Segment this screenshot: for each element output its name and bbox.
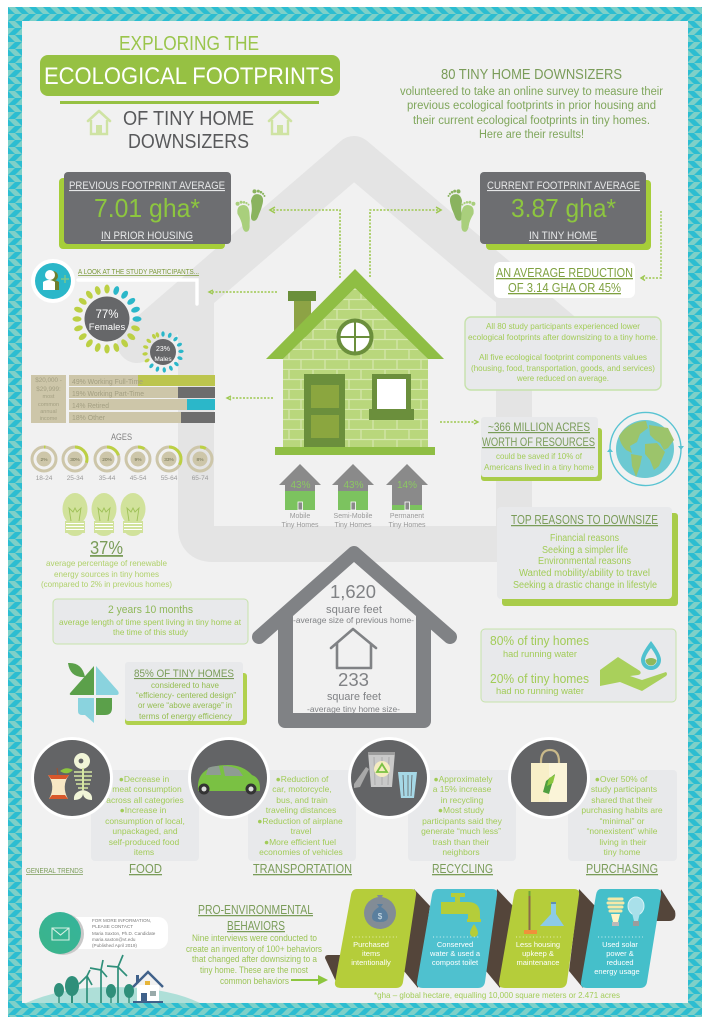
panel: running water: had running water — [503, 649, 577, 659]
icon: faucet — [441, 893, 481, 937]
door — [304, 374, 345, 447]
recycling text: neighbors — [442, 847, 480, 857]
chart: employment bars: 14% Retired — [72, 401, 109, 410]
icon: small house outline — [331, 629, 376, 668]
icon: hand — [600, 657, 667, 691]
panel: top reasons: TOP REASONS TO DOWNSIZE — [511, 513, 658, 527]
panel: 366 million acres: WORTH OF RESOURCES — [482, 435, 595, 449]
contact block — [39, 912, 168, 955]
current value: 3.87 gha* — [511, 193, 616, 223]
panel: efficiency: “efficiency- centered design” — [136, 690, 236, 700]
purchasing text: living in their — [599, 837, 647, 847]
chart: tiny home types — [279, 464, 428, 529]
icon: small house right — [269, 111, 291, 134]
panel: income: common — [38, 402, 59, 408]
recycling text: generate “much less” — [421, 826, 501, 836]
panel: lower footprints — [465, 317, 661, 390]
tiny home size — [307, 670, 400, 714]
card: upkeep — [499, 889, 579, 988]
purchasing text: “minimal” or — [600, 816, 645, 826]
panel: income: $20,000 - — [35, 377, 62, 384]
panel: time in tiny home: 2 years 10 months — [108, 604, 193, 616]
behaviors body: common behaviors — [220, 976, 289, 986]
renewable text — [41, 558, 172, 589]
contact text: (Published April 2019) — [92, 943, 137, 948]
chart: tiny home types: Tiny Homes — [281, 522, 319, 529]
chart: tiny home types: 43% — [343, 480, 364, 491]
intro body: volunteered to take an online survey to measure their — [400, 86, 663, 98]
panel: income: income — [40, 416, 57, 422]
round window — [338, 320, 372, 354]
panel: income: most — [43, 394, 55, 400]
icon: footprints right — [447, 189, 476, 233]
panel: efficiency — [125, 662, 247, 725]
panel: 366 million acres: could be saved if 10% of — [496, 451, 583, 461]
icon: person — [43, 270, 69, 290]
recycling text: participants said they — [422, 816, 503, 826]
panel: previous footprint — [59, 172, 231, 249]
renewable value: 37% — [90, 538, 123, 558]
contact text — [92, 918, 156, 948]
panel: running water: had no running water — [496, 686, 584, 696]
card: upkeep: maintenance — [517, 958, 559, 967]
ages heading: AGES — [111, 432, 132, 442]
card: energy: Used solar — [602, 940, 638, 949]
intro body: previous ecological footprints in prior housing and — [407, 100, 656, 112]
previous home size: square feet — [326, 604, 382, 616]
panel: time in tiny home: average length of time spent living in tiny home at — [59, 617, 242, 627]
card: purchased — [335, 889, 416, 988]
panel: top reasons: Environmental reasons — [538, 556, 631, 567]
renewable text: (compared to 2% in previous homes) — [41, 579, 172, 589]
card: water: Conserved — [437, 940, 473, 949]
ribbon connectors — [325, 889, 675, 988]
big grey house: home sizes — [259, 553, 450, 728]
chart: ages: 20% — [102, 457, 113, 463]
intro text — [400, 66, 663, 141]
chart: tiny home types: Mobile — [290, 513, 310, 520]
card: purchased: Purchased — [353, 940, 389, 949]
transportation text: ●Reduction of — [276, 774, 329, 784]
previous home size — [293, 582, 414, 625]
chart: ages: 35-44 — [99, 475, 116, 482]
contact text: maria.saxton@vt.edu — [92, 937, 136, 942]
panel: top reasons: Financial reasons — [550, 533, 619, 544]
chart: ages: 25-34 — [67, 475, 84, 482]
general trends label: GENERAL TRENDS — [26, 866, 83, 875]
contact text: PLEASE CONTACT — [92, 924, 133, 929]
icon: water drop — [641, 641, 661, 670]
panel: efficiency: or were “above average” in — [138, 700, 232, 710]
panel: 366 million acres: ~366 MILLION ACRES — [488, 420, 590, 434]
chart: ages: 18-24 — [36, 475, 53, 482]
panel: income: annual — [40, 409, 57, 415]
arrow: to resources — [440, 420, 478, 424]
food text — [105, 774, 185, 857]
tiny home size: -average tiny home size- — [307, 705, 400, 714]
transportation text: economies of vehicles — [259, 847, 343, 857]
wind turbines — [79, 955, 127, 1003]
title line 4: DOWNSIZERS — [128, 131, 249, 153]
transportation text — [257, 774, 343, 857]
arrow: income — [227, 396, 273, 400]
icon: footprints left — [235, 189, 266, 233]
food text: unpackaged, and — [112, 826, 178, 836]
contact text: Maria Saxton, Ph.D. Candidate — [92, 931, 156, 936]
chart: tiny home types: Permanent — [390, 513, 424, 520]
chart: ages: 8% — [197, 457, 204, 463]
icon: money bag: $ — [378, 912, 383, 921]
icon: fish skeleton — [74, 753, 92, 800]
previous value: 7.01 gha* — [94, 193, 200, 223]
trees — [54, 976, 134, 1003]
panel: food trends — [31, 737, 199, 876]
transportation text: travel — [291, 826, 311, 836]
chart: ages: 2% — [41, 457, 48, 463]
card: water: water & used a — [429, 949, 481, 958]
tiny home size: 233 — [338, 670, 369, 690]
background house outline — [137, 156, 575, 544]
behaviors body: Nine interviews were conducted to — [192, 933, 317, 943]
panel: running water — [481, 629, 676, 702]
chart: employment bars — [69, 375, 215, 423]
panel: time in tiny home: the time of this study — [113, 627, 189, 637]
chart: males 23% — [142, 331, 184, 373]
chart: males 23%: 23% — [156, 346, 170, 353]
recycling text: a 15% increase — [433, 784, 492, 794]
chart: males 23%: Males — [154, 356, 172, 363]
chart: tiny home types: 14% — [397, 480, 417, 491]
panel: running water: 20% of tiny homes — [490, 671, 589, 686]
arrow: to previous footprint — [270, 207, 340, 278]
tiny home size: square feet — [327, 691, 381, 703]
food text: meat consumption — [112, 784, 182, 794]
icon: small house left — [88, 111, 110, 134]
food text: ●Increase in — [120, 805, 167, 815]
participants label: A LOOK AT THE STUDY PARTICIPANTS... — [78, 267, 199, 276]
behaviors heading: PRO-ENVIRONMENTAL — [198, 903, 313, 917]
icon: car — [198, 765, 260, 794]
transportation text: car, motorcycle, — [272, 784, 332, 794]
panel: income — [31, 375, 66, 423]
panel: top reasons — [497, 507, 678, 606]
chart: ages: 45-54 — [130, 475, 147, 482]
chimney — [288, 291, 316, 337]
landscape illustration — [26, 955, 200, 1003]
card: water: compost toilet — [432, 958, 479, 967]
intro body — [400, 86, 663, 141]
purchasing text: ●Over 50% of — [595, 774, 648, 784]
intro body: their current ecological footprints in tiny homes. — [413, 115, 650, 127]
panel: running water: 80% of tiny homes — [490, 633, 589, 648]
transportation text: traveling distances — [266, 805, 336, 815]
intro heading: 80 TINY HOME DOWNSIZERS — [441, 66, 622, 83]
transportation text: bus, and train — [276, 795, 328, 805]
farmhouse — [133, 972, 163, 1003]
card: purchased: items — [362, 949, 380, 958]
chart: females 77%: Females — [89, 322, 125, 333]
icon: shopping bag — [531, 750, 567, 802]
previous note: IN PRIOR HOUSING — [101, 230, 193, 242]
chart: employment bars: 49% Working Full-Time — [72, 377, 143, 386]
panel: 366 million acres: Americans lived in a tiny home — [484, 462, 594, 472]
panel: study participants heading — [31, 259, 199, 304]
panel: transportation trends — [188, 737, 356, 876]
icon: envelope — [52, 928, 69, 940]
title line 2: ECOLOGICAL FOOTPRINTS — [44, 63, 334, 90]
icon: recycling bins — [354, 752, 417, 798]
chart: ages — [32, 432, 212, 482]
panel: current footprint — [480, 172, 651, 250]
renewable text: average percentage of renewable — [46, 558, 167, 568]
title rule — [60, 101, 319, 104]
chart: ages: 65-74 — [192, 475, 209, 482]
chart: employment bars: 19% Working Part-Time — [72, 389, 144, 398]
card: energy: power & — [606, 949, 634, 958]
panel: efficiency: considered to have — [151, 680, 219, 690]
roof — [266, 269, 444, 359]
food text: across all categories — [106, 795, 184, 805]
purchasing text: shared that their — [591, 795, 653, 805]
walls — [283, 288, 428, 447]
panel: purchasing trends — [508, 737, 677, 876]
purchasing text: study participants — [591, 784, 657, 794]
title — [40, 33, 340, 153]
food text: consumption of local, — [105, 816, 185, 826]
card: energy: reduced — [606, 958, 634, 967]
panel: recycling trends — [348, 737, 516, 876]
panel: top reasons: Seeking a simpler life — [542, 545, 628, 556]
chart: ages: 9% — [135, 457, 142, 463]
previous home size: -average size of previous home- — [293, 616, 414, 625]
previous label: PREVIOUS FOOTPRINT AVERAGE — [69, 180, 225, 192]
panel: lower footprints: (housing, food, transportation, goods, and services) — [471, 363, 655, 373]
square window — [369, 374, 414, 420]
chart: tiny home types: Tiny Homes — [388, 522, 426, 529]
behaviors body: that changed after downsizing to a — [192, 954, 317, 964]
panel: lower footprints: ecological footprints after downsizing to a tiny home. — [468, 332, 658, 342]
arrow: reduction — [641, 211, 661, 280]
panel: lower footprints: were reduced on average. — [516, 373, 609, 383]
icon: efficiency house — [68, 663, 119, 723]
panel: time in tiny home — [53, 599, 248, 644]
chart: tiny home types: Semi-Mobile — [334, 513, 373, 520]
chart: ages: 55-64 — [161, 475, 178, 482]
panel: efficiency: 85% OF TINY HOMES — [134, 668, 234, 680]
transportation text: ●More efficient fuel — [264, 837, 336, 847]
callout: average reduction: AN AVERAGE REDUCTION — [496, 265, 633, 280]
arrow: participants — [209, 290, 277, 294]
card: water — [417, 889, 497, 988]
recycling text — [421, 774, 503, 857]
food text: self-produced food — [109, 837, 179, 847]
purchasing label: PURCHASING — [586, 861, 658, 876]
food text: items — [134, 847, 154, 857]
arrow: to current footprint — [370, 207, 441, 277]
previous home size: 1,620 — [330, 582, 376, 602]
title pill — [40, 55, 340, 96]
chart: females 77% — [72, 284, 142, 354]
current note: IN TINY HOME — [529, 230, 597, 242]
chart: employment bars: 18% Other — [72, 413, 105, 422]
panel: income: $29,999: — [36, 386, 61, 393]
purchasing text: tiny home — [604, 847, 641, 857]
behaviors body: create an inventory of 100+ behaviors — [186, 944, 322, 954]
recycling text: ●Approximately — [434, 774, 493, 784]
contact text: FOR MORE INFORMATION, — [92, 918, 151, 923]
icon: light bulbs — [62, 493, 146, 536]
icon: apple core — [48, 768, 73, 799]
renewable energy stat — [41, 538, 172, 589]
chart: ages: 33% — [164, 457, 175, 463]
chart: females 77%: 77% — [95, 309, 119, 321]
title line 1: EXPLORING THE — [119, 33, 259, 55]
transportation label: TRANSPORTATION — [253, 861, 352, 876]
purchasing text: purchasing habits are — [581, 805, 663, 815]
arrow: to behaviors — [291, 975, 328, 985]
callout: average reduction — [494, 262, 635, 298]
behaviors body — [186, 933, 322, 986]
icon: light bulbs — [608, 897, 644, 926]
card: energy — [581, 889, 661, 988]
intro body: Here are their results! — [479, 129, 584, 141]
panel: lower footprints: All 80 study participants experienced lower — [486, 321, 640, 331]
panel: 366 million acres — [481, 417, 602, 481]
recycling text: trash than their — [433, 837, 490, 847]
card: upkeep: Less housing — [516, 940, 560, 949]
pro-environmental behaviors text — [186, 903, 328, 986]
icon: broom and dustpan — [524, 891, 564, 934]
recycling text: ●Most study — [438, 805, 485, 815]
behaviors body: tiny home. These are the most — [200, 965, 308, 975]
panel: lower footprints: All five ecological footprint components values — [479, 352, 647, 362]
current label: CURRENT FOOTPRINT AVERAGE — [487, 180, 640, 192]
food text: ●Decrease in — [119, 774, 170, 784]
pro-environmental behaviors text: BEHAVIORS — [227, 919, 285, 933]
card: energy: energy usage — [594, 967, 640, 976]
title line 3: OF TINY HOME — [123, 108, 254, 130]
panel: top reasons: Seeking a drastic change in lifestyle — [513, 580, 657, 591]
recycling text: in recycling — [441, 795, 484, 805]
footnote: *gha – global hectare, equalling 10,000 square meters or 2.471 acres — [374, 990, 620, 1000]
card: purchased: intentionally — [351, 958, 391, 967]
card: upkeep: upkeep & — [522, 949, 554, 958]
recycling label: RECYCLING — [432, 861, 493, 876]
renewable text: energy sources in tiny homes — [54, 569, 159, 579]
icon: globe — [607, 412, 684, 486]
panel: top reasons: Wanted mobility/ability to travel — [519, 568, 650, 579]
purchasing text — [581, 774, 663, 857]
callout: average reduction: OF 3.14 GHA OR 45% — [508, 280, 621, 295]
chart: tiny home types: 43% — [290, 480, 311, 491]
chart: tiny home types: Tiny Homes — [334, 522, 372, 529]
food label: FOOD — [129, 861, 162, 876]
transportation text: ●Reduction of airplane — [257, 816, 343, 826]
purchasing text: “nonexistent” while — [587, 826, 658, 836]
panel: efficiency: terms of energy efficiency — [139, 711, 233, 721]
main house illustration — [266, 269, 444, 455]
ribbon: behaviors — [325, 889, 675, 988]
chart: ages: 30% — [70, 457, 81, 463]
base — [275, 447, 435, 455]
